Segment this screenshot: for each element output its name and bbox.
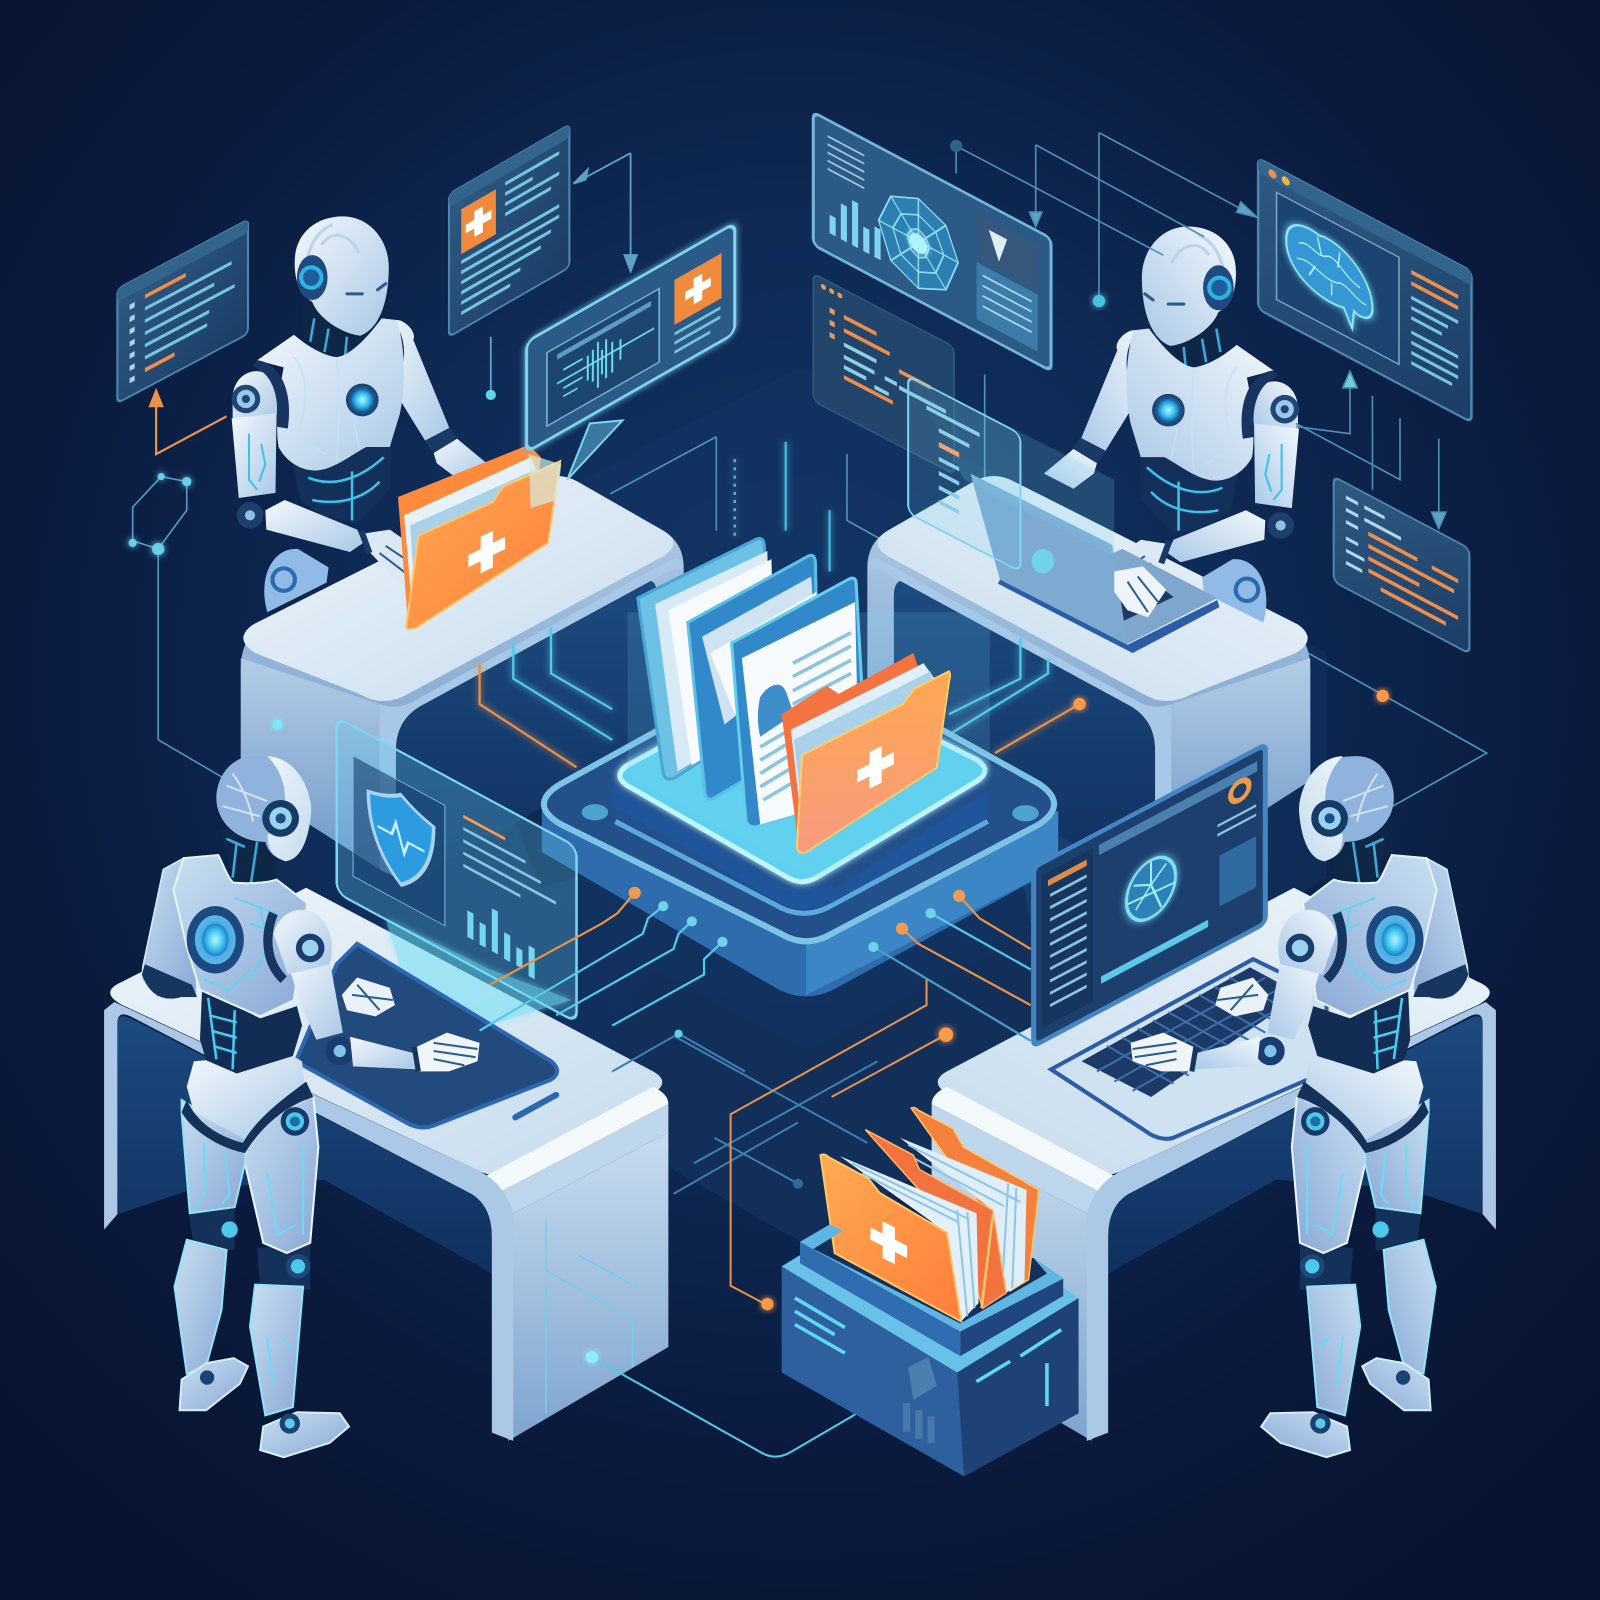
panel: code lines lower right (1334, 477, 1469, 654)
node: cyan glow left (272, 719, 283, 730)
circuit on desk leg (546, 1219, 638, 1413)
icon: shield (368, 777, 434, 902)
arrows: top-right panel links (950, 133, 1446, 529)
panel: shield dashboard (holographic) (337, 717, 577, 1022)
icon: brain (1286, 217, 1372, 339)
holographic beam under shield panel (386, 918, 571, 1027)
desk: top right (867, 476, 1310, 888)
avatar on record (758, 685, 794, 737)
connectors behind desks (158, 374, 1487, 806)
panel: radar and charts (813, 112, 1051, 371)
folder: held by top-left robot (398, 445, 561, 629)
chart: bars (467, 895, 535, 979)
node: orange dot right (1073, 698, 1086, 710)
icon: network hexagon (129, 473, 191, 555)
platform: central server base (542, 612, 1058, 996)
tray: glowing surface (620, 675, 985, 882)
icon: radar web (879, 177, 958, 309)
laptop: top-right desk (908, 376, 1219, 653)
circuits: floor routes (586, 980, 953, 1457)
desk: bottom right (932, 888, 1496, 1441)
panel: glowing signal analysis (527, 223, 735, 480)
robot: bottom left operator (142, 756, 480, 1457)
folder: centre orange medical folder (782, 653, 950, 853)
node: orange glow right (1377, 690, 1389, 702)
circuits: below the platform (480, 887, 1031, 1041)
arrow: orange from robot to left panel (150, 391, 227, 454)
robot: top right at laptop (1044, 227, 1299, 622)
folders: in the drawer (820, 1107, 1039, 1321)
circuits behind the platform (480, 442, 1080, 767)
monitor: brain analysis screen (1034, 745, 1265, 1046)
file box: bottom drawer (782, 1107, 1079, 1477)
file stack: centre binders and documents (638, 538, 867, 827)
tablet: bottom-left desk touch surface (296, 944, 557, 1127)
desk: bottom left (104, 888, 668, 1441)
drawer body faces (782, 1224, 1079, 1477)
keyboard: bottom-right desk (1051, 959, 1327, 1139)
icon: orange cross tile (461, 189, 496, 254)
robot: top left holding folder (232, 216, 487, 612)
panel: translucent overlay (908, 376, 1020, 572)
panel: faded code list (813, 273, 954, 474)
robot: bottom right operator (1131, 756, 1468, 1457)
desk: top left (241, 476, 684, 888)
panel: left code list (117, 220, 248, 403)
chart: bar mini (830, 188, 881, 260)
panel: brain scan (1258, 158, 1471, 422)
panel: medical record with orange cross (449, 125, 569, 337)
arrows: top-left panel links (486, 153, 637, 400)
icon: brain globe (1127, 847, 1176, 930)
floor: dark diamond platform areas (245, 367, 1327, 1245)
